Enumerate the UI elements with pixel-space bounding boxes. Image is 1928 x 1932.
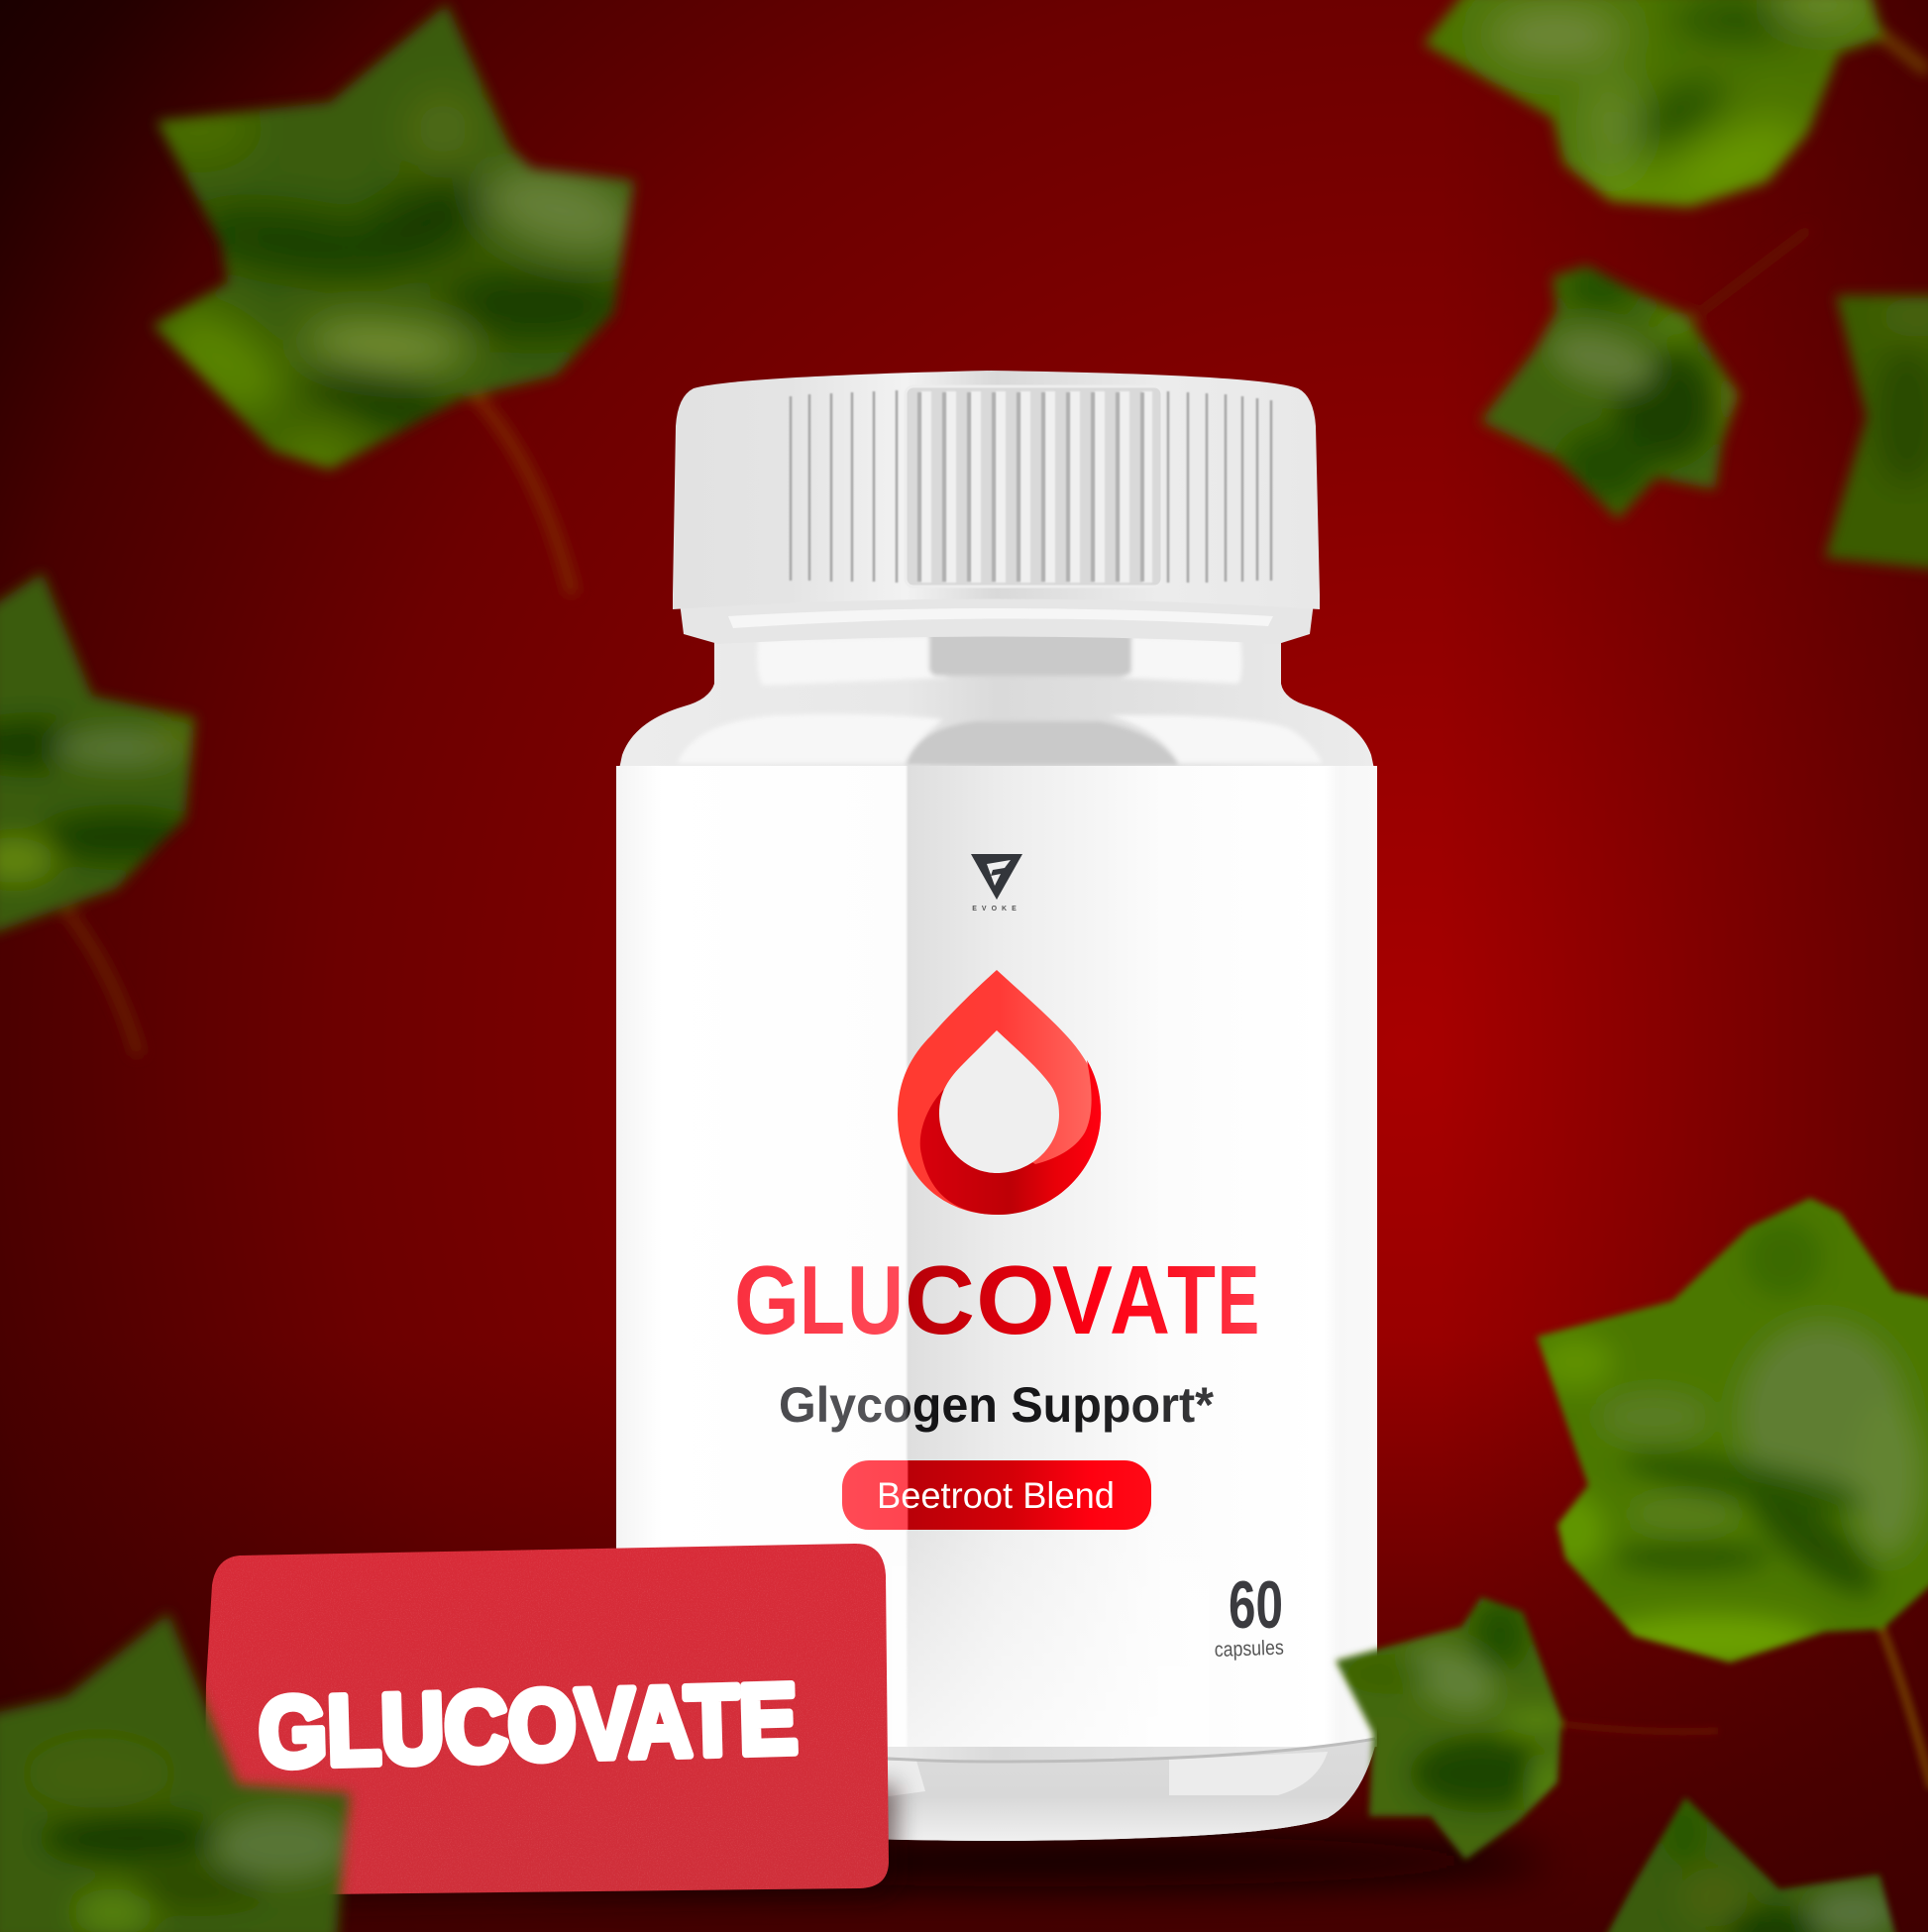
- capsule count: capsules: [1214, 1637, 1284, 1662]
- product name: E: [1218, 1245, 1259, 1354]
- product name: A: [1110, 1245, 1170, 1354]
- card shape: [204, 1544, 889, 1895]
- bottle cap: [673, 371, 1320, 609]
- leaf: right small: [1476, 228, 1811, 525]
- product name: C: [905, 1245, 975, 1354]
- bottle body: [616, 599, 1377, 1841]
- cap center rib shadows: [919, 392, 1142, 582]
- cap center band: [906, 386, 1162, 587]
- brand logo: [971, 854, 1022, 912]
- leaves in front: [0, 1585, 1902, 1932]
- leaf: bottom left: [0, 1605, 357, 1932]
- label panel: [616, 766, 1377, 1747]
- capsule count: 60: [1229, 1567, 1283, 1643]
- card texture: [204, 1544, 889, 1895]
- product subtitle: Glycogen Support*: [779, 1377, 1215, 1433]
- leaf: bottom right corner: [1603, 1795, 1899, 1932]
- bottle base: [616, 1732, 1377, 1841]
- brand logo: EVOKE: [972, 906, 1021, 912]
- base rim line: [616, 1732, 1375, 1762]
- leaf: top right: [1417, 0, 1928, 232]
- blend badge: Beetroot Blend: [877, 1475, 1115, 1516]
- blend badge: [842, 1460, 1151, 1530]
- capsule count: [1214, 1567, 1284, 1662]
- drop logo: [898, 970, 1101, 1215]
- cap center ribs: [926, 391, 1147, 583]
- bottle neck ring: [678, 587, 1316, 644]
- base highlights: [882, 1752, 1328, 1797]
- red card: [204, 1544, 897, 1907]
- drop inner hole: [939, 1030, 1059, 1173]
- shoulder highlights: [678, 714, 1323, 765]
- leaf: right edge: [1823, 287, 1928, 575]
- product name: G: [734, 1245, 800, 1354]
- product name: L: [800, 1245, 845, 1354]
- leaf: left middle: [0, 565, 203, 1055]
- product name: U: [847, 1245, 904, 1354]
- leaf: top left: [139, 0, 647, 594]
- label lower fade: [892, 1466, 1209, 1747]
- leaf: bottom right middle: [1328, 1585, 1718, 1868]
- cap left ribs: [791, 390, 897, 583]
- drop dark ribbon: [920, 1060, 1101, 1215]
- bottle ground shadow: [515, 1835, 1546, 1886]
- product name: T: [1167, 1245, 1216, 1354]
- card shadow: [233, 1783, 897, 1907]
- card title: GLUCOVATE: [258, 1664, 799, 1788]
- bottle: [616, 371, 1377, 1841]
- product name: O: [976, 1245, 1055, 1354]
- product name: V: [1052, 1245, 1113, 1354]
- cap right ribs: [1168, 391, 1271, 583]
- neck ring highlight: [728, 608, 1273, 628]
- leaf: bottom right large: [1526, 1189, 1928, 1788]
- neck highlights: [757, 616, 1242, 686]
